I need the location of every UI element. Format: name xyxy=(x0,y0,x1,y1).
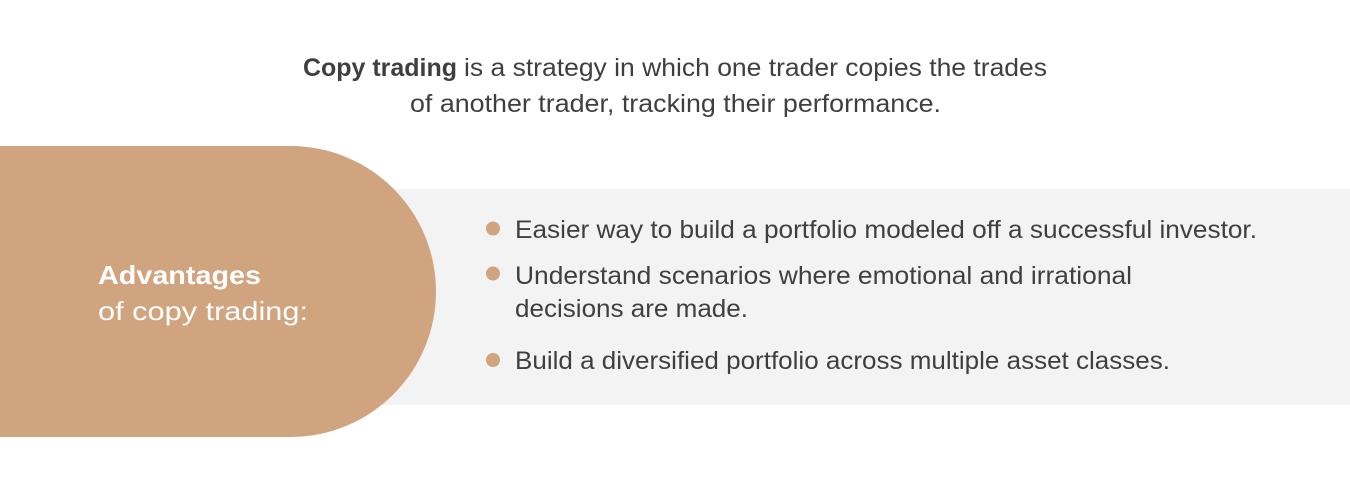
heading: advantages of copy trading: Advantages xyxy=(98,260,261,290)
intro text: of another trader, tracking their performance. xyxy=(410,90,941,118)
intro text: Copy trading xyxy=(303,54,457,82)
heading: advantages of copy trading: of copy trading: xyxy=(98,296,308,326)
list item 2 xyxy=(486,262,1132,323)
heading: advantages of copy trading xyxy=(98,260,308,326)
panel: advantages list background xyxy=(300,189,1350,405)
panel: advantages heading pill xyxy=(0,146,436,437)
list item 3: Build a diversified portfolio across multiple asset classes. xyxy=(515,347,1170,375)
list item 2: decisions are made. xyxy=(515,295,748,323)
list item 1: Easier way to build a portfolio modeled off a successful investor. xyxy=(515,216,1257,244)
intro text xyxy=(303,54,1047,118)
intro text: is a strategy in which one trader copies the trades xyxy=(464,54,1047,82)
list item 2: Understand scenarios where emotional and irrational xyxy=(515,262,1132,290)
